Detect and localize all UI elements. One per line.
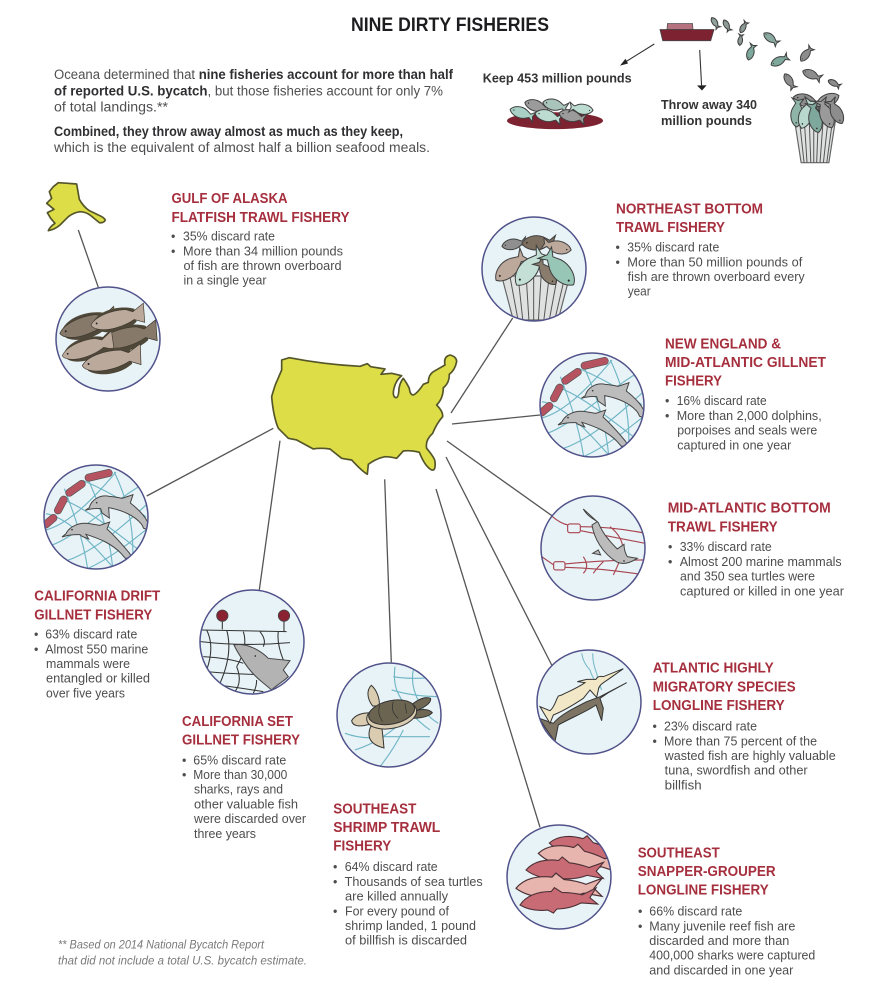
- bullet list: Thousands of sea turtles: [345, 875, 483, 889]
- bullet list: [333, 860, 483, 948]
- bullet list: 400,000 sharks were captured: [649, 949, 815, 963]
- heading: SHRIMP TRAWL: [333, 820, 440, 836]
- bullet list: other valuable fish: [194, 797, 298, 811]
- panel: Southeast Shrimp Trawl: [333, 663, 483, 948]
- panel: Atlantic Highly Migratory Species Longline: [537, 650, 836, 792]
- bullet list: in a single year: [184, 274, 266, 288]
- bullet list: shrimp landed, 1 pound: [345, 919, 476, 933]
- heading: SOUTHEAST: [333, 801, 416, 817]
- bullet list: •: [34, 642, 38, 656]
- heading: LONGLINE FISHERY: [653, 698, 785, 714]
- bullet list: 64% discard rate: [345, 860, 438, 874]
- icon: snappers: [506, 824, 612, 930]
- bullet list: were discarded over: [193, 812, 306, 826]
- bullet list: discarded and more than: [649, 934, 789, 948]
- heading: TRAWL FISHERY: [616, 220, 725, 236]
- heading: [333, 801, 440, 855]
- icon: dolphin in trawl net: [541, 496, 645, 600]
- footnote: [58, 940, 307, 968]
- bullet list: [171, 230, 343, 288]
- bullet list: 16% discard rate: [677, 394, 767, 408]
- heading: [616, 201, 763, 236]
- heading: [665, 336, 826, 390]
- bullet list: [34, 627, 150, 700]
- icon: fishing boat: [660, 24, 714, 41]
- bullet list: [616, 241, 805, 299]
- bullet list: [652, 720, 836, 792]
- bullet list: •: [668, 540, 672, 554]
- bullet list: •: [616, 241, 620, 255]
- icon: plate of fish: [507, 96, 603, 129]
- bullet list: 23% discard rate: [664, 720, 757, 734]
- bullet list: •: [333, 904, 337, 918]
- connector lines: [78, 230, 553, 827]
- icon: swordfish: [537, 650, 641, 754]
- bullet list: are killed annually: [345, 890, 449, 904]
- heading: MIGRATORY SPECIES: [653, 679, 796, 695]
- footnote: that did not include a total U.S. bycatch estimate.: [58, 956, 307, 968]
- heading: [34, 589, 160, 623]
- heading: FISHERY: [333, 839, 392, 855]
- bullet list: •: [333, 860, 337, 874]
- bullet list: of fish are thrown overboard: [184, 259, 342, 273]
- arrow: keep: [620, 44, 654, 66]
- bullet list: More than 2,000 dolphins,: [677, 409, 822, 423]
- bullet list: fish are thrown overboard every: [628, 270, 805, 284]
- panel: California Drift Gillnet: [34, 465, 160, 700]
- bullet list: and discarded in one year: [649, 963, 793, 977]
- label: throw away: Throw away 340: [661, 97, 757, 112]
- heading: CALIFORNIA SET: [182, 714, 293, 730]
- heading: GILLNET FISHERY: [34, 607, 153, 623]
- panel: Mid-Atlantic Bottom Trawl: [541, 496, 844, 600]
- heading: [172, 191, 350, 226]
- bullet list: billfish: [665, 778, 702, 792]
- bullet list: captured or killed in one year: [680, 584, 844, 598]
- bullet list: 66% discard rate: [649, 904, 742, 918]
- bullet list: •: [652, 720, 657, 734]
- bullet list: 35% discard rate: [627, 241, 719, 255]
- bullet list: wasted fish are highly valuable: [664, 749, 836, 763]
- heading: MID-ATLANTIC GILLNET: [665, 355, 826, 371]
- heading: GULF OF ALASKA: [172, 191, 288, 207]
- panel: Gulf of Alaska: [56, 191, 350, 391]
- bullet list: •: [171, 230, 175, 244]
- title: NINE DIRTY FISHERIES: [351, 15, 549, 36]
- bullet list: More than 50 million pounds of: [627, 255, 803, 269]
- bullet list: More than 34 million pounds: [183, 244, 343, 258]
- panel: New England and Mid-Atlantic Gillnet: [540, 336, 826, 457]
- bullet list: 65% discard rate: [193, 753, 286, 767]
- bullet list: •: [333, 875, 337, 889]
- bullet list: •: [638, 904, 642, 918]
- heading: NEW ENGLAND &: [665, 336, 781, 352]
- bullet list: [182, 753, 306, 841]
- bullet list: •: [652, 734, 657, 748]
- bullet list: entangled or killed: [46, 672, 150, 686]
- intro text: [53, 67, 453, 155]
- heading: FLATFISH TRAWL FISHERY: [172, 210, 350, 226]
- bullet list: sharks, rays and: [194, 783, 283, 797]
- icon: shark in set gillnet: [200, 590, 304, 694]
- heading: MID-ATLANTIC BOTTOM: [668, 501, 831, 517]
- bullet list: tuna, swordfish and other: [665, 764, 808, 778]
- heading: [638, 845, 776, 899]
- heading: GILLNET FISHERY: [182, 733, 300, 749]
- heading: [668, 501, 831, 535]
- bullet list: three years: [194, 827, 256, 841]
- heading: [182, 714, 300, 749]
- label: throw away: million pounds: [661, 113, 752, 128]
- bullet list: More than 75 percent of the: [664, 734, 817, 748]
- intro text: Oceana determined that nine fisheries account for more than half: [54, 67, 453, 82]
- bullet list: Almost 200 marine mammals: [680, 555, 842, 569]
- bullet list: 35% discard rate: [183, 230, 275, 244]
- heading: LONGLINE FISHERY: [638, 883, 769, 899]
- icon: flying discarded fish: [710, 16, 841, 90]
- heading: ATLANTIC HIGHLY: [653, 661, 774, 677]
- bullet list: •: [638, 919, 642, 933]
- panel: Southeast Snapper-Grouper Longline: [507, 825, 815, 977]
- panel: Northeast Bottom Trawl: [482, 201, 805, 321]
- heading: CALIFORNIA DRIFT: [34, 589, 160, 605]
- map: Alaska: [47, 183, 105, 231]
- bullet list: over five years: [46, 686, 125, 700]
- bullet list: More than 30,000: [193, 768, 287, 782]
- bullet list: [638, 904, 815, 977]
- icon: flatfish: [56, 287, 160, 391]
- bullet list: 63% discard rate: [45, 627, 137, 641]
- panel: California Set Gillnet: [182, 590, 306, 841]
- intro text: of reported U.S. bycatch, but those fisheries account for only 7%: [54, 84, 443, 99]
- bullet list: •: [616, 255, 620, 269]
- arrow: throw away: [697, 50, 707, 90]
- bullet list: and 350 sea turtles were: [680, 570, 815, 584]
- map: contiguous United States: [272, 355, 457, 474]
- bullet list: [668, 540, 844, 598]
- intro text: of total landings.**: [54, 99, 169, 114]
- heading: TRAWL FISHERY: [668, 519, 778, 535]
- heading: SOUTHEAST: [638, 845, 720, 861]
- intro text: Combined, they throw away almost as much as they keep,: [54, 124, 403, 139]
- bullet list: of billfish is discarded: [345, 934, 467, 948]
- bullet list: Many juvenile reef fish are: [649, 919, 795, 933]
- intro text: which is the equivalent of almost half a billion seafood meals.: [53, 140, 430, 155]
- icon: dolphins in gillnet: [540, 353, 645, 457]
- bullet list: Almost 550 marine: [45, 642, 148, 656]
- footnote: ** Based on 2014 National Bycatch Report: [58, 940, 265, 952]
- icon: dolphins in drift gillnet: [44, 465, 149, 569]
- bullet list: •: [182, 753, 186, 767]
- bullet list: mammals were: [46, 657, 130, 671]
- icon: basket of discarded fish: [790, 90, 847, 163]
- bullet list: •: [171, 244, 175, 258]
- bullet list: •: [665, 394, 669, 408]
- bullet list: •: [668, 555, 672, 569]
- bullet list: year: [628, 285, 651, 299]
- bullet list: [665, 394, 822, 452]
- heading: SNAPPER-GROUPER: [638, 864, 776, 880]
- heading: FISHERY: [665, 374, 722, 390]
- bullet list: •: [665, 409, 669, 423]
- icon: sea turtle: [337, 663, 442, 767]
- bullet list: •: [182, 768, 186, 782]
- bullet list: •: [34, 627, 38, 641]
- label: keep: Keep 453 million pounds: [483, 71, 632, 86]
- bullet list: For every pound of: [345, 904, 450, 918]
- bullet list: captured in one year: [677, 438, 791, 452]
- label: throw away: [661, 97, 757, 128]
- bullet list: 33% discard rate: [680, 540, 772, 554]
- bullet list: porpoises and seals were: [677, 424, 817, 438]
- heading: NORTHEAST BOTTOM: [616, 201, 763, 217]
- icon: basket of fish: [482, 217, 586, 321]
- heading: [653, 661, 796, 714]
